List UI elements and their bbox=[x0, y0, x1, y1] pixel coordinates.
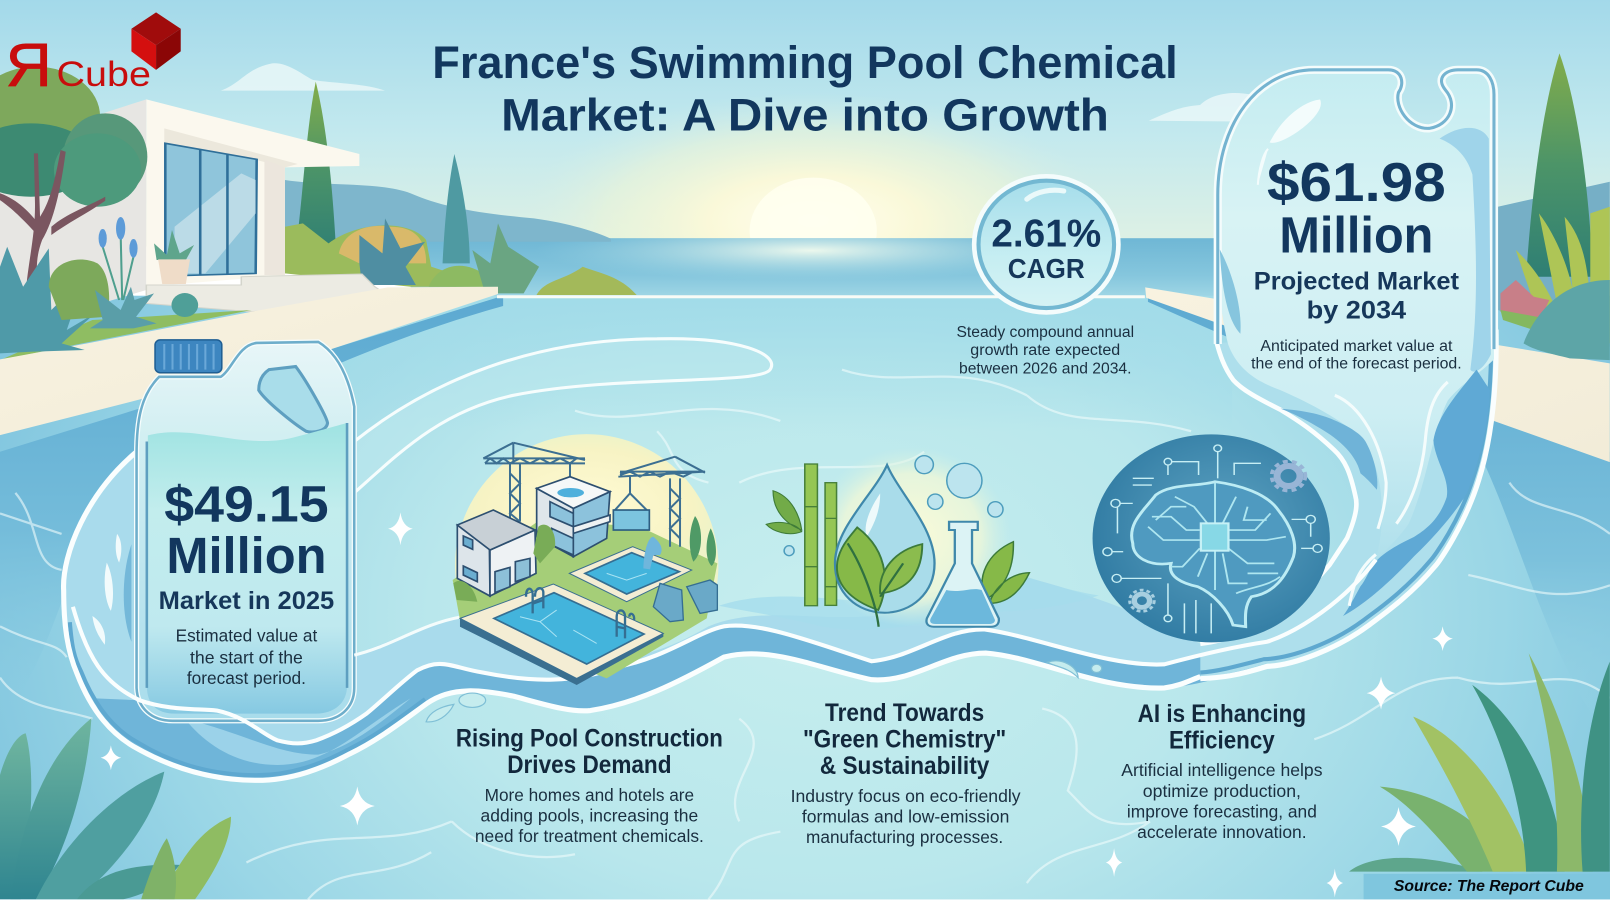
fountain bbox=[643, 537, 662, 569]
glow bbox=[811, 447, 1010, 627]
bamboo bbox=[805, 464, 837, 606]
body: Industry focus on eco-friendly bbox=[791, 786, 1021, 806]
cypress trees bbox=[690, 516, 716, 566]
big pool water bbox=[494, 593, 644, 664]
body: improve forecasting, and bbox=[1127, 801, 1317, 821]
ribbon top thin loop bbox=[354, 339, 772, 493]
logo bbox=[6, 12, 181, 100]
logo: Cube bbox=[56, 55, 151, 94]
cloud right bbox=[1149, 93, 1267, 122]
shrub on sea bbox=[536, 267, 637, 295]
pool caustics bbox=[520, 573, 647, 643]
sun disc bbox=[750, 178, 877, 284]
agave mid bbox=[359, 218, 425, 285]
lawn bbox=[453, 520, 717, 678]
cypress right bbox=[1526, 53, 1593, 277]
leaves bottom left bbox=[0, 718, 231, 899]
far hill bbox=[1498, 182, 1610, 347]
distant sea bbox=[411, 238, 1253, 300]
CAGR description: Steady compound annual bbox=[956, 324, 1134, 341]
label: Projected Market bbox=[1254, 269, 1459, 296]
card: AI efficiency bbox=[1121, 701, 1323, 842]
body: accelerate innovation. bbox=[1137, 822, 1307, 842]
agave left bbox=[0, 247, 95, 353]
chemical jug bbox=[137, 340, 354, 721]
heading: "Green Chemistry" bbox=[803, 726, 1006, 753]
heading: Drives Demand bbox=[507, 752, 672, 779]
logo cube bbox=[131, 12, 181, 70]
ladders bbox=[526, 588, 634, 638]
description: forecast period. bbox=[187, 668, 306, 688]
ribbon pale inner streaks bbox=[185, 698, 411, 765]
jug liquid bbox=[147, 423, 347, 714]
body: optimize production, bbox=[1143, 781, 1301, 801]
sky background bbox=[0, 0, 1610, 246]
heading: Rising Pool Construction bbox=[456, 725, 723, 752]
mountains bbox=[285, 180, 611, 242]
jug cap bbox=[155, 340, 222, 373]
projected market water bubble: the end of the forecast period. bbox=[1251, 356, 1462, 373]
ribbon body bbox=[64, 452, 1200, 780]
body: More homes and hotels are bbox=[485, 785, 694, 805]
bubbles bbox=[784, 456, 1003, 556]
bamboo leaves bbox=[766, 491, 802, 534]
house bbox=[0, 99, 359, 333]
wave upper pale band bbox=[719, 577, 1099, 630]
big leaf bbox=[837, 527, 885, 610]
ribbon left highlights bbox=[92, 534, 121, 645]
body bbox=[791, 786, 1021, 847]
sparkles bbox=[101, 512, 1453, 897]
heading bbox=[456, 725, 723, 779]
landscape left: hill, house, trees and plants bbox=[0, 63, 637, 435]
teal bush bbox=[1524, 280, 1610, 360]
stems bbox=[848, 543, 903, 627]
source credit: Source: The Report Cube bbox=[1394, 878, 1584, 895]
ribbon right section bbox=[1200, 330, 1494, 677]
title: Market: A Dive into Growth bbox=[501, 89, 1109, 140]
pool equipment bbox=[653, 580, 717, 622]
dark tail streak left bbox=[1280, 409, 1377, 490]
heading bbox=[1138, 701, 1306, 755]
CAGR description: between 2026 and 2034. bbox=[959, 361, 1132, 378]
water caustics bbox=[0, 370, 1610, 899]
right ribbon white outer line bbox=[1200, 330, 1496, 679]
pool water base bbox=[0, 296, 1610, 902]
deck right bbox=[1145, 287, 1610, 462]
value: $49.15 bbox=[164, 476, 329, 533]
projected market water bubble bbox=[1218, 70, 1494, 616]
terrace steps bbox=[146, 274, 388, 312]
label: Market in 2025 bbox=[159, 588, 335, 615]
jug outline bbox=[137, 342, 354, 721]
description: the start of the bbox=[190, 647, 303, 667]
description: Estimated value at bbox=[176, 626, 317, 646]
bubble shape bbox=[1218, 70, 1494, 560]
jug inner wall line bbox=[147, 423, 347, 688]
body bbox=[1121, 760, 1323, 842]
icon: green chemistry bbox=[766, 447, 1029, 627]
planter bbox=[154, 230, 194, 284]
body: adding pools, increasing the bbox=[481, 805, 698, 825]
crane right bbox=[615, 457, 705, 547]
bubble highlight bbox=[1027, 190, 1064, 199]
lavender bbox=[99, 217, 138, 300]
landscape right: deck, cypress and plants bbox=[1145, 53, 1610, 462]
small pool deck bbox=[569, 547, 692, 602]
CAGR description bbox=[956, 324, 1134, 378]
round stone bbox=[171, 293, 198, 317]
lawn right bbox=[1500, 310, 1554, 333]
pool tile wall left bbox=[0, 296, 503, 719]
cypress mid bbox=[443, 154, 470, 263]
pool tile wall right bbox=[1148, 292, 1610, 739]
lawn bbox=[0, 310, 252, 360]
upper jug wave line bbox=[354, 617, 460, 655]
gear top bbox=[1272, 461, 1305, 491]
jug outer glow bbox=[137, 342, 354, 721]
icon: AI brain bbox=[1093, 434, 1330, 642]
left crescent shade bbox=[124, 544, 131, 642]
water ribbon lower band bbox=[64, 330, 1496, 897]
bubble rim bbox=[979, 181, 1114, 308]
bubble circle bbox=[974, 177, 1118, 312]
pool edge line bbox=[497, 295, 1145, 298]
brain outline bbox=[1132, 482, 1295, 627]
leaves bottom right bbox=[1349, 653, 1610, 872]
heading: Efficiency bbox=[1169, 728, 1275, 755]
heading: AI is Enhancing bbox=[1138, 701, 1306, 728]
small pool water bbox=[585, 553, 679, 594]
ribbon outer white edge bbox=[64, 452, 1200, 780]
source band bbox=[1364, 874, 1610, 899]
hanging panel bbox=[613, 510, 649, 530]
tree bbox=[0, 67, 147, 293]
drop bbox=[835, 465, 935, 613]
body: formulas and low-emission bbox=[802, 806, 1009, 826]
CAGR label: CAGR bbox=[1008, 253, 1085, 284]
cypress back bbox=[295, 82, 336, 253]
flask liquid bbox=[930, 589, 995, 624]
CAGR value: 2.61% bbox=[991, 212, 1101, 255]
dark shrub bbox=[49, 260, 109, 320]
CAGR description: growth rate expected bbox=[970, 342, 1120, 359]
unit: Million bbox=[1279, 207, 1433, 264]
body: manufacturing processes. bbox=[806, 827, 1003, 847]
jug handle hole bbox=[259, 367, 328, 432]
bubble inner shading right bbox=[1440, 128, 1491, 372]
small leaf bbox=[880, 544, 922, 593]
white inner tail lines bbox=[1335, 382, 1448, 606]
bushes behind terrace bbox=[285, 223, 493, 287]
brain disc bbox=[1093, 434, 1330, 642]
ribbon outer dark edge bbox=[70, 622, 425, 775]
pool deck big bbox=[460, 618, 663, 685]
body: Artificial intelligence helps bbox=[1121, 760, 1323, 780]
bubble highlights bbox=[1258, 101, 1320, 185]
agave right bbox=[472, 223, 539, 293]
dark tail streak right bbox=[1343, 370, 1490, 616]
tower building bbox=[537, 477, 610, 557]
body: need for treatment chemicals. bbox=[475, 826, 704, 846]
gear bottom bbox=[1130, 590, 1154, 611]
body bbox=[475, 785, 704, 846]
circuit traces bbox=[1148, 483, 1286, 593]
title: France's Swimming Pool Chemical bbox=[432, 37, 1178, 88]
right ribbon outer edge bbox=[1200, 339, 1491, 673]
heading: Trend Towards bbox=[825, 700, 984, 727]
water crest over jug base bbox=[73, 560, 1376, 743]
bottom white strip bbox=[0, 899, 1610, 909]
description bbox=[176, 626, 317, 688]
value: $61.98 bbox=[1267, 152, 1446, 213]
bubble white rim bbox=[1218, 70, 1494, 349]
cloud left bbox=[221, 63, 385, 91]
orange shrub bbox=[339, 226, 426, 263]
right ribbon white inner line bbox=[1200, 343, 1356, 644]
crane left bbox=[483, 443, 585, 522]
description: Anticipated market value at bbox=[1260, 338, 1453, 355]
circuit nodes bbox=[1103, 445, 1322, 633]
green shrub bbox=[429, 266, 493, 287]
drop highlight bbox=[866, 493, 880, 537]
unit: Million bbox=[166, 527, 327, 584]
sun circle bbox=[455, 434, 718, 587]
sun glow bbox=[515, 92, 1111, 349]
flask leaves bbox=[982, 542, 1029, 603]
heading bbox=[803, 700, 1006, 780]
bubble inner shading left bbox=[1220, 250, 1241, 334]
logo wordmark: Я bbox=[6, 31, 52, 100]
spiky plant by lawn bbox=[90, 287, 157, 328]
card: rising pool construction bbox=[456, 725, 723, 846]
pink plant bbox=[1500, 280, 1549, 323]
front building bbox=[457, 510, 536, 596]
title bbox=[432, 37, 1178, 140]
ribbon dark band bbox=[92, 626, 1267, 780]
icon: pool construction bbox=[453, 434, 718, 685]
bushes bbox=[453, 525, 555, 602]
projected market water bubble: by 2034 bbox=[1307, 297, 1407, 324]
CAGR bubble bbox=[974, 177, 1118, 312]
heading: & Sustainability bbox=[820, 753, 990, 780]
deck left bbox=[0, 287, 498, 435]
agave right yellow bbox=[1516, 207, 1610, 343]
central chip bbox=[1201, 523, 1228, 551]
droplets bbox=[426, 661, 1102, 722]
card: green chemistry bbox=[791, 700, 1021, 847]
bubble outline bbox=[1218, 70, 1494, 349]
flask bbox=[926, 522, 999, 627]
